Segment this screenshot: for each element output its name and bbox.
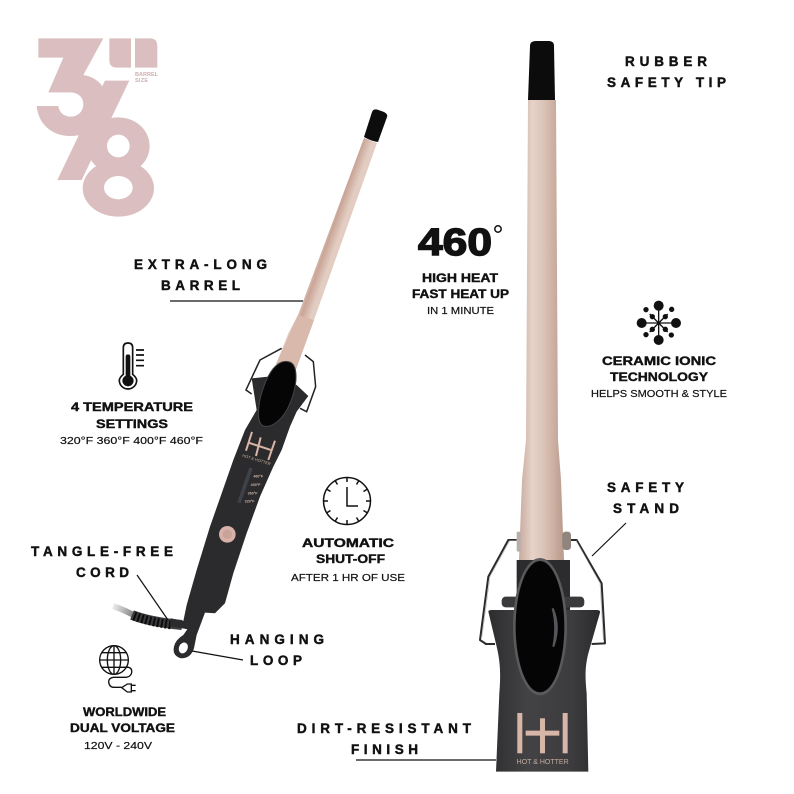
handle close-up: [488, 610, 600, 772]
feature: automatic shut-off: AFTER 1 HR OF USE: [291, 572, 405, 584]
temperature scale: 320°F: [245, 500, 255, 504]
icon: clock: [324, 478, 371, 525]
temperature scale: [237, 467, 264, 504]
icon: thermometer: [119, 343, 144, 389]
callout: tangle-free cord: CORD: [76, 565, 129, 580]
power cord: [113, 606, 137, 617]
rubber safety tip: [528, 41, 555, 100]
callout: rubber safety tip: [607, 54, 726, 90]
safety tip: [364, 109, 387, 142]
feature: worldwide dual voltage: 120V - 240V: [84, 740, 152, 752]
feature: worldwide dual voltage: WORLDWIDE: [83, 705, 166, 719]
close-up curling iron product image: [480, 41, 605, 772]
feature: ceramic ionic technology: [591, 354, 727, 400]
callout: extra-long barrel: BARREL: [161, 278, 240, 293]
feature: 460 degrees high heat: 460: [418, 222, 492, 264]
stand wires close-up: [480, 540, 605, 644]
heat slot: [258, 361, 296, 426]
feature: worldwide dual voltage: DUAL VOLTAGE: [70, 721, 175, 735]
temperature scale: 400°F: [251, 483, 261, 487]
callout: tangle-free cord: TANGLE-FREE: [31, 544, 173, 559]
feature: automatic shut-off: AUTOMATIC: [302, 536, 394, 550]
feature: 460 degrees high heat: IN 1 MINUTE: [427, 305, 494, 317]
callout: dirt-resistant finish: FINISH: [351, 742, 418, 757]
callout: safety stand: [592, 480, 684, 556]
full curling iron product image: [113, 109, 387, 658]
icon: ceramic ions: [637, 301, 681, 345]
callout: hanging loop: LOOP: [250, 653, 302, 668]
barrel: [276, 138, 377, 372]
feature: 4 temperature settings: 320°F 360°F 400°F 460°F: [60, 435, 203, 447]
H+H logo: [246, 432, 275, 460]
stand collar: [517, 560, 570, 610]
barrel size logo: 3/8 inch: [37, 38, 157, 217]
callout: extra-long barrel: EXTRA-LONG: [134, 257, 267, 272]
feature: automatic shut-off: SHUT-OFF: [316, 552, 385, 566]
barrel size label: [135, 72, 159, 84]
brand name close-up: HOT & HOTTER: [517, 759, 569, 766]
callout: dirt-resistant finish: [297, 721, 496, 760]
callout: safety stand: SAFETY: [607, 480, 684, 495]
callout: dirt-resistant finish: DIRT-RESISTANT: [297, 721, 472, 736]
pivot screws: [517, 532, 521, 552]
feature: 460 degrees high heat: FAST HEAT UP: [412, 287, 509, 301]
feature: automatic shut-off: [291, 536, 405, 584]
barrel close-up: [519, 100, 564, 560]
callout: extra-long barrel: [134, 257, 303, 301]
callout: rubber safety tip: SAFETY TIP: [607, 75, 726, 90]
feature: ceramic ionic technology: TECHNOLOGY: [610, 370, 708, 384]
feature: 460 degrees high heat: HIGH HEAT: [422, 271, 499, 285]
temperature scale: 460°F: [253, 474, 264, 478]
feature: ceramic ionic technology: CERAMIC IONIC: [602, 354, 716, 368]
stand wires: [246, 348, 316, 412]
brand name: HOT & HOTTER: [242, 453, 272, 466]
barrel size label: BARREL: [135, 72, 159, 78]
feature: 4 temperature settings: SETTINGS: [96, 417, 168, 431]
callout: rubber safety tip: RUBBER: [625, 54, 707, 69]
feature: ceramic ionic technology: HELPS SMOOTH & STYLE: [591, 388, 727, 400]
temperature scale: 360°F: [248, 492, 258, 496]
feature: worldwide dual voltage: [70, 705, 175, 752]
callout: hanging loop: HANGING: [230, 632, 324, 647]
heat slot close-up: [513, 558, 567, 695]
feature: 460 degrees high heat: [412, 222, 509, 317]
callout: tangle-free cord: [31, 544, 173, 620]
H+H logo close-up: [517, 713, 568, 753]
feature: 4 temperature settings: 4 TEMPERATURE: [71, 400, 193, 414]
handle body: [170, 377, 308, 658]
icon: globe with plug: [100, 646, 136, 692]
barrel size label: SIZE: [135, 78, 148, 84]
power button: [219, 526, 236, 543]
feature: 4 temperature settings: [60, 400, 203, 447]
callout: hanging loop: [192, 632, 324, 668]
callout: safety stand: STAND: [613, 501, 679, 516]
